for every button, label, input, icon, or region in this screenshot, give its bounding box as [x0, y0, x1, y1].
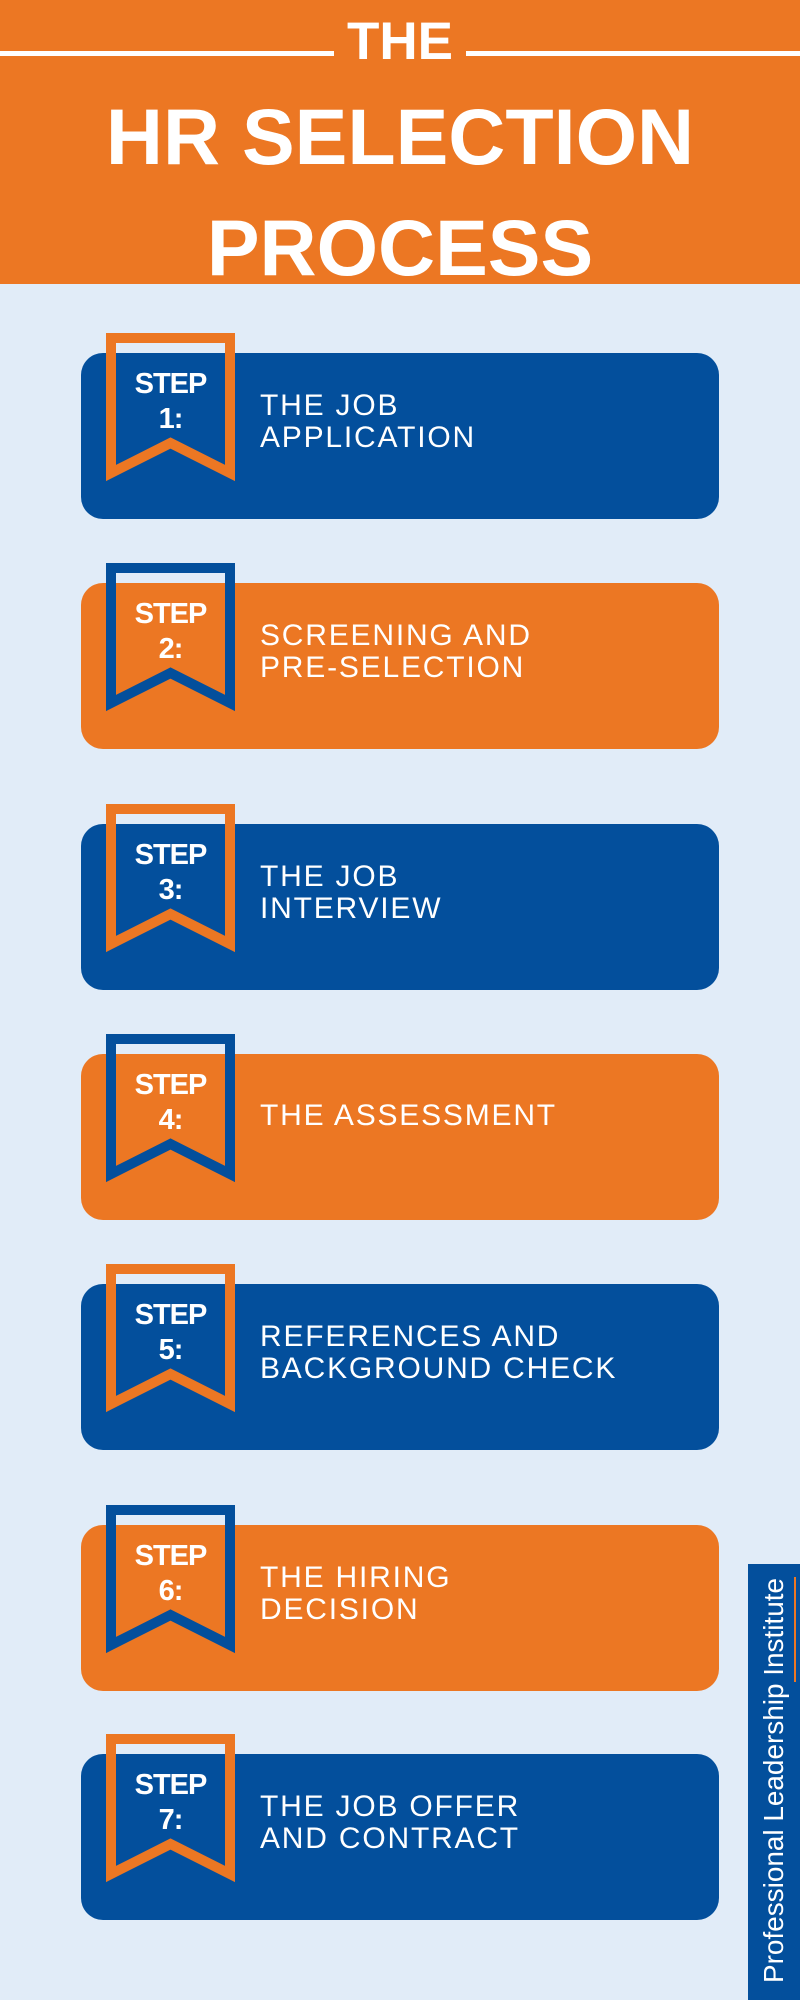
step label: [135, 1540, 206, 1607]
step 7 card: [81, 1754, 719, 1920]
step text: THE JOB: [260, 389, 399, 422]
step text: [260, 860, 442, 925]
step label: [135, 1299, 206, 1366]
step text: THE JOB OFFER: [260, 1790, 520, 1823]
step text: THE JOB: [260, 860, 399, 893]
ribbon: [106, 804, 235, 952]
step label: 3:: [159, 874, 182, 906]
step label: STEP: [135, 598, 206, 630]
step label: STEP: [135, 368, 206, 400]
step label: [135, 839, 206, 906]
ribbon: [106, 1264, 235, 1412]
step label: STEP: [135, 1540, 206, 1572]
step label: 6:: [159, 1575, 182, 1607]
step 4 card: [81, 1054, 719, 1220]
ribbon: [106, 563, 235, 712]
step label: 4:: [159, 1104, 182, 1136]
title: HR SELECTION PROCESS: [106, 92, 694, 292]
step text: PRE-SELECTION: [260, 651, 525, 684]
ribbon: [106, 1034, 235, 1182]
step text: THE HIRING: [260, 1561, 451, 1594]
ribbon: [106, 333, 235, 482]
step text: AND CONTRACT: [260, 1822, 520, 1855]
step text: BACKGROUND CHECK: [260, 1352, 617, 1385]
ribbon: [106, 1505, 235, 1654]
title: THE: THE: [347, 12, 453, 71]
step text: SCREENING AND: [260, 619, 532, 652]
step 6 card: [81, 1525, 719, 1691]
step label: 5:: [159, 1334, 182, 1366]
header line left: [0, 51, 334, 56]
step label: 1:: [159, 403, 182, 435]
side tab: Professional Leadership Institute: Professional Leadership Institute: [758, 1578, 789, 1983]
step label: STEP: [135, 1069, 206, 1101]
step label: [135, 1769, 206, 1836]
step text: [260, 1790, 520, 1855]
title: HR SELECTION PROCESS: HR SELECTION: [106, 92, 694, 181]
step label: 7:: [159, 1804, 182, 1836]
step text: THE ASSESSMENT: [260, 1099, 557, 1132]
step label: [135, 1069, 206, 1136]
step label: STEP: [135, 1299, 206, 1331]
step text: [260, 389, 476, 454]
step text: REFERENCES AND: [260, 1320, 560, 1353]
step 5 card: [81, 1284, 719, 1450]
step text: DECISION: [260, 1593, 419, 1626]
step label: [135, 598, 206, 665]
header line right: [466, 51, 800, 56]
step 1 card: [81, 353, 719, 519]
step label: STEP: [135, 1769, 206, 1801]
title: HR SELECTION PROCESS: PROCESS: [207, 203, 593, 292]
ribbon: [106, 1734, 235, 1882]
step 3 card: [81, 824, 719, 990]
step text: APPLICATION: [260, 421, 476, 454]
step label: 2:: [159, 633, 182, 665]
step text: [260, 1561, 451, 1626]
header banner: [0, 0, 800, 284]
step text: [260, 1320, 617, 1385]
step 2 card: [81, 583, 719, 749]
step label: STEP: [135, 839, 206, 871]
step text: [260, 619, 532, 684]
step label: [135, 368, 206, 435]
step text: INTERVIEW: [260, 892, 442, 925]
